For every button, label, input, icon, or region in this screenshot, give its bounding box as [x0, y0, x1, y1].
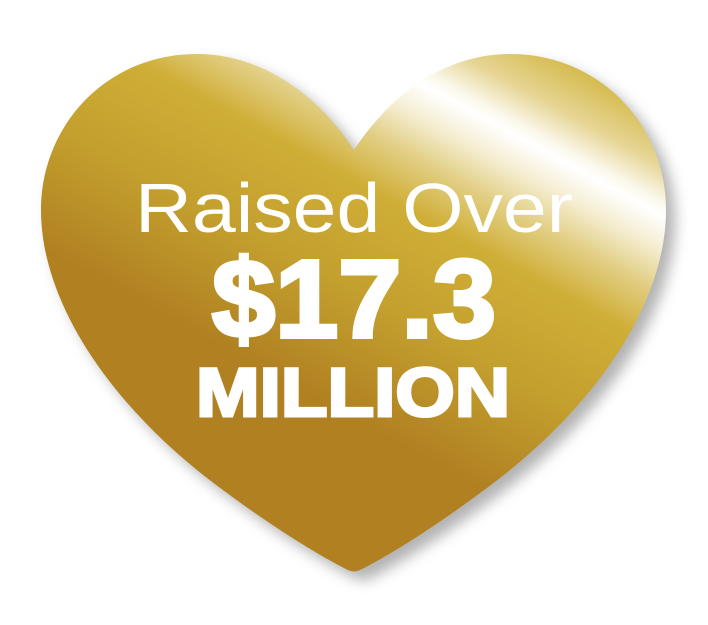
heart shadow: [50, 63, 675, 580]
heading: Raised Over: Raised Over: [135, 169, 573, 247]
amount: $17.3: $17.3: [212, 238, 496, 361]
label: MILLION: MILLION: [196, 354, 510, 431]
gold heart: [41, 54, 666, 572]
